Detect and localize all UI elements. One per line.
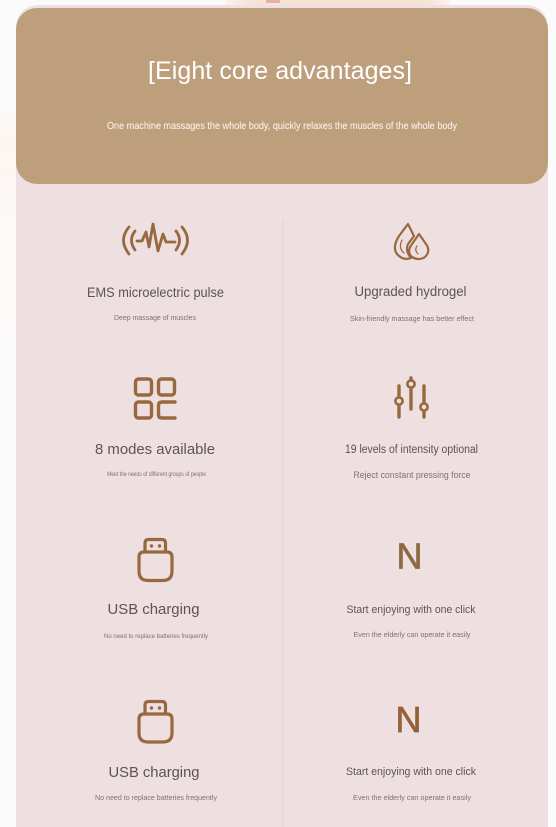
icon: letter N: N <box>396 699 422 740</box>
feature: Upgraded hydrogel <box>350 224 475 323</box>
heading: 19 levels of intensity optional <box>345 444 478 456</box>
icon: pulse wave <box>124 224 188 254</box>
feature: USB charging, third row <box>104 540 209 640</box>
feature: EMS microelectric pulse <box>87 224 224 322</box>
heading: Start enjoying with one click <box>346 604 476 616</box>
icon: letter N: N <box>396 536 422 576</box>
icon: sliders <box>395 378 428 417</box>
icon: four squares <box>136 379 175 418</box>
feature: Start enjoying with one click, third row <box>346 536 476 639</box>
description: No need to replace batteries frequently <box>95 793 217 802</box>
decorative divider <box>282 220 284 827</box>
description: Meet the needs of different groups of people <box>107 472 207 478</box>
description: Even the elderly can operate it easily <box>353 793 471 802</box>
feature: 8 modes available <box>95 379 215 478</box>
icon: USB plug <box>139 702 172 742</box>
icon: USB plug <box>139 540 172 580</box>
title: [Eight core advantages] <box>148 57 412 85</box>
description: Even the elderly can operate it easily <box>354 630 471 639</box>
heading: Start enjoying with one click <box>346 766 476 778</box>
panel: header banner <box>16 8 548 184</box>
heading: USB charging <box>108 764 200 781</box>
heading: USB charging <box>108 601 200 618</box>
description: No need to replace batteries frequently <box>104 633 209 640</box>
heading: 8 modes available <box>95 442 215 458</box>
subtitle: One machine massages the whole body, quickly relaxes the muscles of the whole body <box>107 121 457 132</box>
icon: water drops <box>395 224 428 259</box>
feature: Start enjoying with one click, fourth row <box>346 699 476 802</box>
feature: 19 levels of intensity optional <box>345 378 478 480</box>
heading: Upgraded hydrogel <box>354 284 466 299</box>
feature: USB charging, fourth row <box>95 702 217 802</box>
description: Skin-friendly massage has better effect <box>350 314 475 323</box>
description: Reject constant pressing force <box>354 470 470 480</box>
description: Deep massage of muscles <box>114 315 196 322</box>
heading: EMS microelectric pulse <box>87 285 224 300</box>
